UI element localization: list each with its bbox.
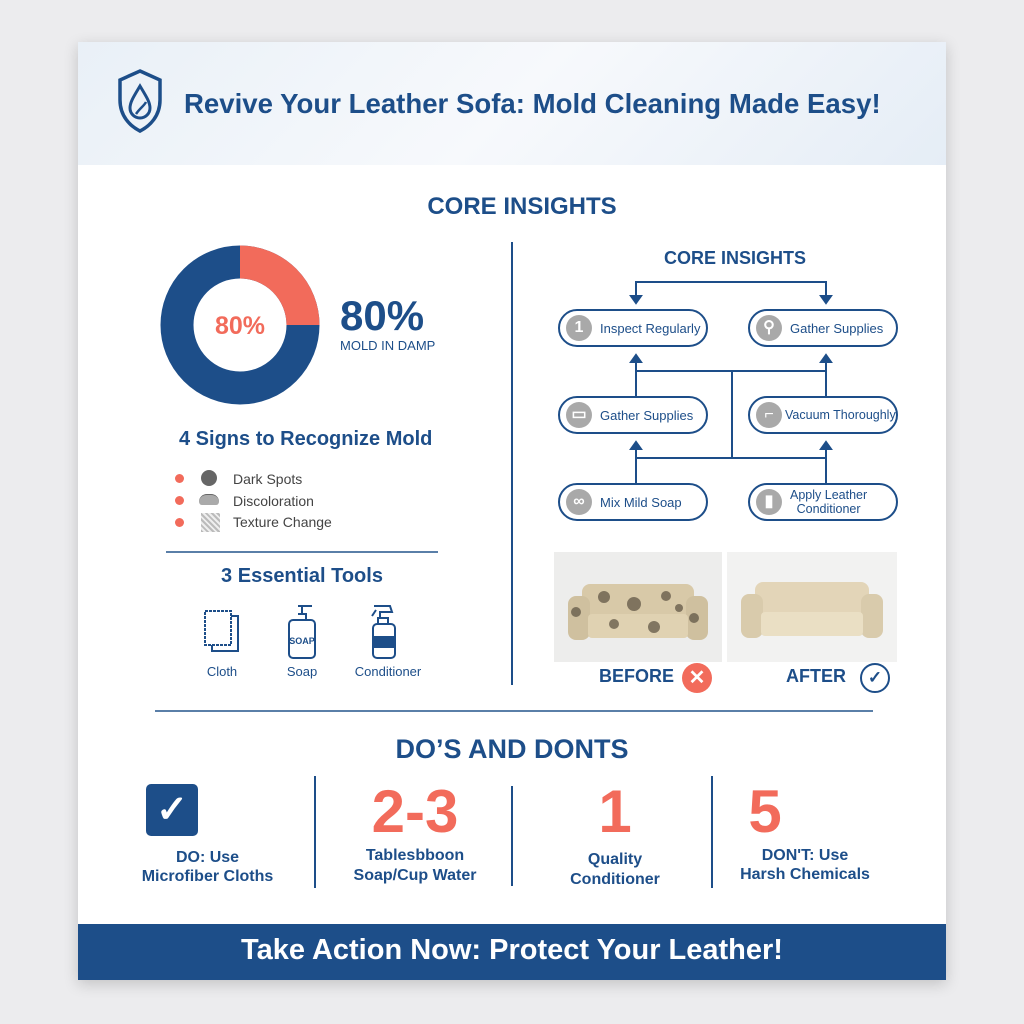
- flowchart: CORE INSIGHTS: [664, 248, 806, 268]
- footer call to action: Take Action Now: Protect Your Leather!: [241, 934, 783, 966]
- before photo: [554, 552, 722, 662]
- stat: 1: Quality: [588, 851, 642, 868]
- signs list: Discoloration: [233, 493, 314, 509]
- tools icons: Soap: [287, 664, 317, 679]
- stat: 80% mold in damp: 80%: [340, 292, 424, 339]
- stat: 80% mold in damp: MOLD IN DAMP: [340, 338, 435, 353]
- do: microfiber: ✓: [156, 789, 188, 831]
- icon: soap: SOAP: [289, 636, 315, 646]
- icon: x: ✕: [689, 667, 705, 689]
- signs list: [175, 470, 332, 532]
- heading: tools: 3 Essential Tools: [221, 565, 383, 587]
- stat: 1: Conditioner: [570, 871, 660, 888]
- dont: harsh chemicals: 5: [748, 778, 782, 845]
- stat: 2-3: Soap/Cup Water: [354, 867, 476, 884]
- step: gather supplies 2: Gather Supplies: [600, 408, 693, 422]
- step: gather supplies 2: ▭: [571, 406, 587, 423]
- dont: harsh chemicals: [740, 778, 870, 883]
- signs list: Dark Spots: [233, 471, 302, 487]
- heading: dos and donts: DO’S AND DONTS: [395, 734, 628, 764]
- heading: core insights: CORE INSIGHTS: [427, 193, 617, 220]
- donut chart: 80%: [215, 312, 265, 340]
- stat: 2-3: 2-3: [372, 778, 458, 845]
- step: apply conditioner: [748, 483, 898, 521]
- tools icons: Conditioner: [355, 664, 421, 679]
- dont: harsh chemicals: Harsh Chemicals: [740, 866, 870, 883]
- title: Revive Your Leather Sofa: Mold Cleaning Made Easy!: [184, 88, 881, 119]
- stat: 1: 1: [598, 778, 632, 845]
- step: vacuum: Vacuum Thoroughly: [785, 408, 896, 422]
- stat: 1: [570, 778, 660, 888]
- step: inspect regularly: 1: [575, 319, 583, 336]
- icon: spray: [371, 605, 396, 659]
- stat: 80% mold in damp: [340, 292, 435, 353]
- heading: signs: 4 Signs to Recognize Mold: [179, 428, 432, 450]
- stat: 2-3: Tablesbboon: [366, 847, 464, 864]
- tools icons: [204, 605, 421, 679]
- step: inspect regularly: [558, 309, 708, 347]
- icon: soap: [288, 605, 316, 659]
- header band: [78, 42, 946, 165]
- step: gather supplies 2: [558, 396, 708, 434]
- after photo: [727, 552, 897, 662]
- signs list: Texture Change: [233, 514, 332, 530]
- step: gather supplies: ⚲: [763, 319, 775, 336]
- donut chart: [160, 246, 320, 404]
- label: after: AFTER: [786, 666, 846, 686]
- step: vacuum: [748, 396, 898, 434]
- step: mix soap: Mix Mild Soap: [600, 494, 682, 510]
- footer bar: [78, 924, 946, 980]
- icon: x: [682, 663, 712, 693]
- tools icons: Cloth: [207, 664, 237, 679]
- do: microfiber: Microfiber Cloths: [142, 868, 273, 885]
- divider: [166, 551, 438, 553]
- step: apply conditioner: Conditioner: [797, 502, 861, 516]
- step: apply conditioner: ▮: [765, 493, 773, 510]
- step: apply conditioner: Apply Leather: [790, 488, 867, 502]
- label: before: BEFORE: [599, 666, 674, 686]
- step: gather supplies: [748, 309, 898, 347]
- icon: check: [860, 663, 890, 693]
- step: inspect regularly: Inspect Regularly: [600, 320, 700, 336]
- icon: shield with leaf drop: [118, 69, 162, 133]
- icon: cloth: [204, 610, 239, 652]
- step: gather supplies: Gather Supplies: [790, 320, 883, 336]
- card: [78, 42, 946, 980]
- flowchart: [558, 248, 898, 521]
- step: vacuum: ⌐: [764, 406, 774, 423]
- column dividers: [314, 776, 316, 888]
- icon: check: ✓: [868, 668, 882, 687]
- divider: [155, 710, 873, 712]
- vertical divider: [511, 242, 513, 685]
- do: microfiber: DO: Use: [176, 849, 239, 866]
- dont: harsh chemicals: DON'T: Use: [762, 847, 848, 864]
- stat: 2-3: [354, 778, 476, 884]
- step: mix soap: [558, 483, 708, 521]
- do: microfiber: [142, 784, 273, 885]
- step: mix soap: ∞: [573, 493, 585, 510]
